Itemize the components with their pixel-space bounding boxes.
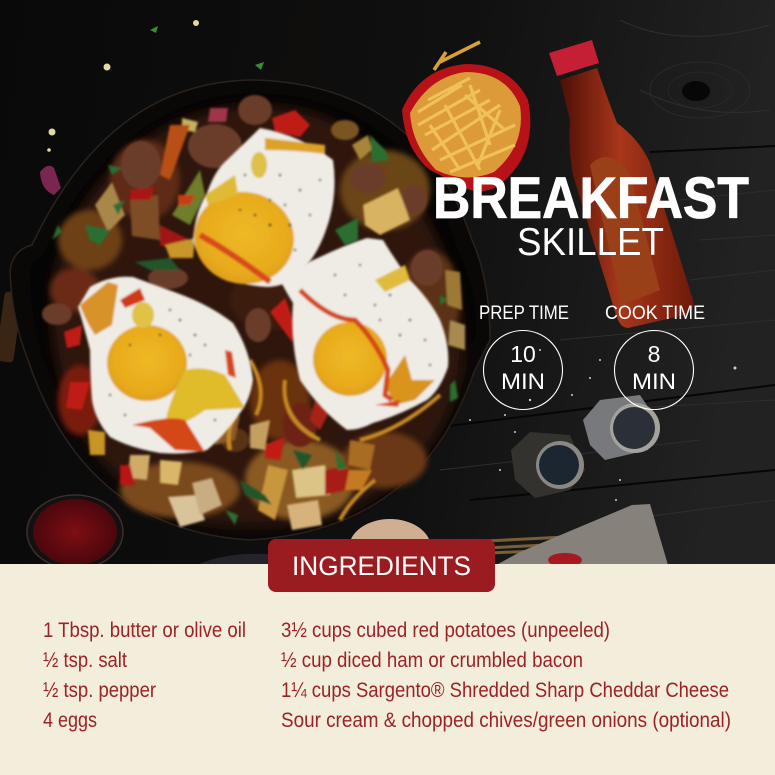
cook time: MIN <box>632 369 676 394</box>
prep time: MIN <box>501 369 545 394</box>
cook time <box>605 303 705 410</box>
egg on table <box>349 519 431 577</box>
title: SKILLET <box>517 221 664 264</box>
fried egg: left <box>78 277 253 454</box>
potato chunks <box>88 118 465 530</box>
ingredient list: right column: ½ cup diced ham or crumbled bacon <box>281 648 583 672</box>
cook time: 8 <box>648 341 660 367</box>
skillet <box>10 0 490 540</box>
shakers <box>511 395 660 498</box>
background: dark wood table <box>0 0 775 565</box>
meat chunks <box>42 95 443 452</box>
pepper specks <box>239 174 321 251</box>
herbs <box>52 135 458 525</box>
hot sauce bottle <box>549 40 693 328</box>
salt shaker <box>583 395 660 460</box>
ingredient list: left column: ½ tsp. pepper <box>43 678 156 702</box>
cheese bowl <box>402 42 530 191</box>
fried egg: right <box>280 238 448 430</box>
ingredients panel background <box>0 564 775 775</box>
prep time <box>479 303 569 410</box>
ingredients heading badge <box>268 539 495 592</box>
ingredient list: left column: 4 eggs <box>43 708 97 732</box>
green pepper <box>172 170 205 225</box>
ingredient list: right column <box>281 618 731 732</box>
cook time: COOK TIME <box>605 303 705 324</box>
skillet handle <box>250 0 345 88</box>
red pepper pieces <box>64 108 350 495</box>
crumbs and herb scattered on table <box>40 20 264 195</box>
ingredient list: left column <box>43 618 246 732</box>
fried egg: top <box>187 128 335 292</box>
napkin, sticks and tomato <box>486 504 668 567</box>
prep time: 10 <box>510 341 536 367</box>
ingredients heading badge: INGREDIENTS <box>292 551 471 581</box>
melted cheese strands <box>229 360 440 520</box>
skillet lower handle <box>197 554 268 565</box>
hash: base of potatoes, meat and peppers <box>42 95 465 530</box>
prep time: PREP TIME <box>479 303 569 324</box>
ingredient list: right column: 3½ cups cubed red potatoes (unpeeled) <box>281 618 610 642</box>
ingredient list: left column: ½ tsp. salt <box>43 648 127 672</box>
ingredient list: left column: 1 Tbsp. butter or olive oil <box>43 618 246 642</box>
title <box>433 166 749 264</box>
pepper shaker <box>511 432 585 498</box>
sauce cup <box>27 495 123 569</box>
